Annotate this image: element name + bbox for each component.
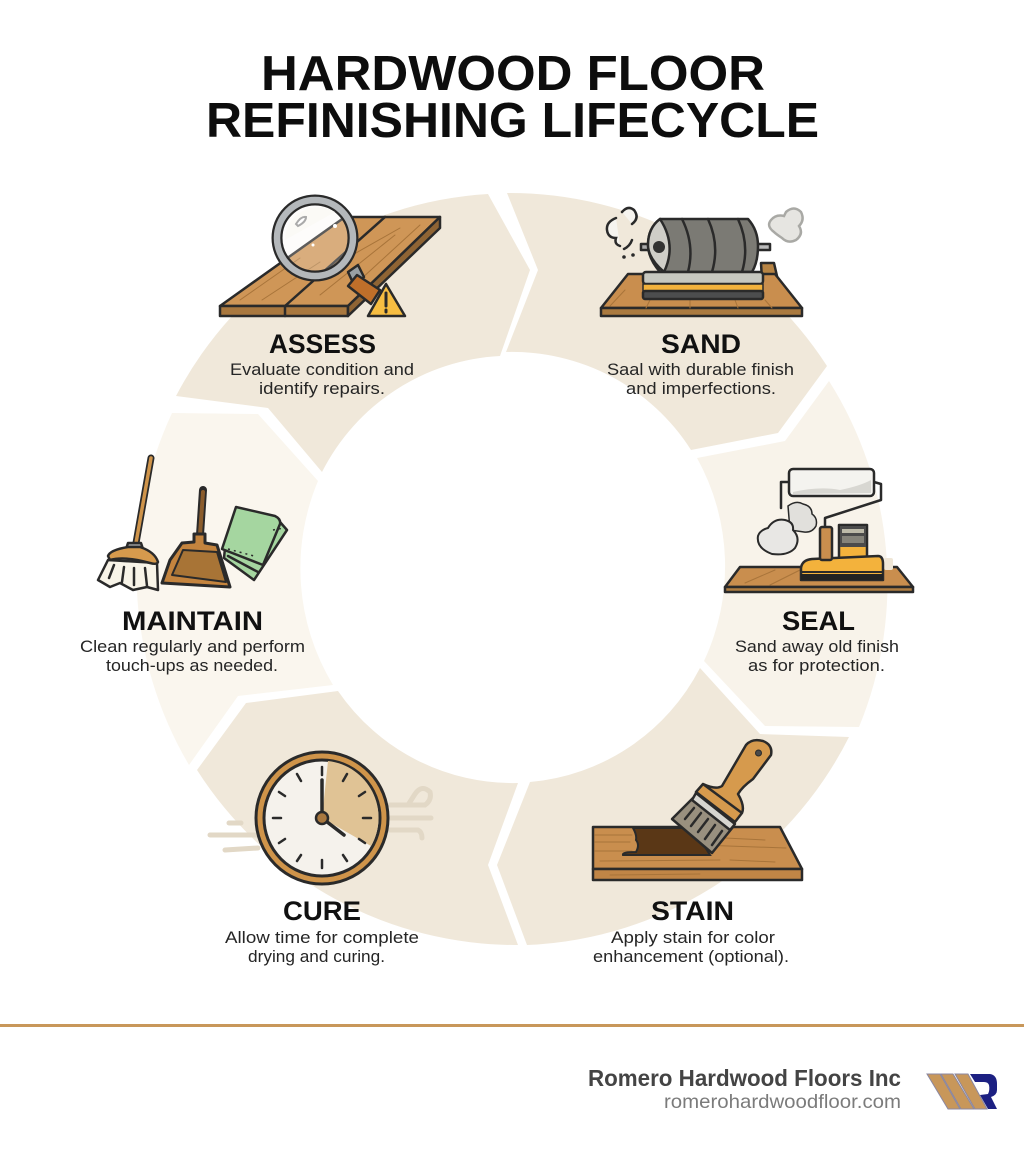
icon: clock bbox=[256, 752, 388, 884]
icon: paint roller bbox=[789, 469, 874, 496]
description: maintain: touch-ups as needed. bbox=[106, 656, 278, 675]
description: stain: enhancement (optional). bbox=[593, 947, 789, 966]
logo letter R bbox=[970, 1074, 997, 1109]
panel: sand bbox=[506, 193, 827, 450]
segment: sand bbox=[506, 193, 827, 450]
icon: drum sander bbox=[601, 208, 803, 316]
title: REFINISHING LIFECYCLE bbox=[206, 94, 819, 148]
description: seal: Sand away old finish bbox=[735, 637, 899, 656]
description: seal: as for protection. bbox=[748, 656, 885, 675]
icon: dust cloud right bbox=[769, 208, 803, 242]
description: sand bbox=[607, 360, 794, 398]
icon: magnifying glass bbox=[277, 200, 380, 304]
segment: seal bbox=[697, 381, 888, 727]
segment: assess bbox=[176, 194, 530, 472]
icon: green cleaning cloth bbox=[222, 507, 287, 580]
heading: stain: STAIN bbox=[651, 896, 734, 926]
description: sand: Saal with durable finish bbox=[607, 360, 794, 379]
panel: stain bbox=[497, 668, 849, 966]
icon: paint brush bbox=[672, 740, 771, 853]
logo planks bbox=[927, 1074, 987, 1109]
heading: sand: SAND bbox=[661, 329, 741, 359]
segment: maintain bbox=[137, 413, 333, 765]
description: assess: Evaluate condition and bbox=[230, 360, 414, 379]
description: cure: Allow time for complete bbox=[225, 928, 419, 947]
footer rule bbox=[0, 1024, 1024, 1027]
heading: maintain: MAINTAIN bbox=[122, 606, 263, 636]
icon: broom bbox=[98, 458, 158, 590]
icon: wood board bbox=[593, 740, 802, 880]
icon: dustpan bbox=[162, 490, 230, 587]
website: romerohardwoodfloor.com bbox=[664, 1091, 901, 1113]
panel: cure bbox=[197, 691, 518, 966]
title bbox=[206, 47, 819, 148]
icon: dust cloud left bbox=[607, 208, 637, 249]
description: maintain: Clean regularly and perform bbox=[80, 637, 305, 656]
description: assess bbox=[230, 360, 414, 398]
segment: cure bbox=[197, 691, 518, 945]
icon: warning triangle bbox=[368, 284, 405, 316]
description: cure: drying and curing. bbox=[248, 947, 385, 966]
logo bbox=[927, 1074, 997, 1109]
panel: assess bbox=[176, 194, 530, 472]
footer brand bbox=[588, 1065, 901, 1113]
icon: stained area bbox=[623, 828, 710, 855]
description: seal bbox=[735, 637, 899, 675]
panel: seal bbox=[697, 381, 913, 727]
icon: fume clouds bbox=[788, 502, 816, 532]
icon: wind lines bbox=[210, 788, 431, 850]
heading: seal: SEAL bbox=[782, 606, 855, 636]
icon: sealing machine and roller bbox=[725, 469, 913, 592]
panel: maintain bbox=[80, 413, 333, 765]
description: maintain bbox=[80, 637, 305, 675]
heading: cure: CURE bbox=[283, 896, 361, 926]
heading: assess: ASSESS bbox=[269, 329, 376, 359]
description: stain: Apply stain for color bbox=[611, 928, 775, 947]
segment: stain bbox=[497, 668, 849, 945]
icon: planks under magnifier bbox=[220, 200, 440, 316]
company name: Romero Hardwood Floors Inc bbox=[588, 1065, 901, 1091]
description: assess: identify repairs. bbox=[259, 379, 385, 398]
description: sand: and imperfections. bbox=[626, 379, 776, 398]
description: stain bbox=[593, 928, 789, 966]
description: cure bbox=[225, 928, 419, 966]
title: HARDWOOD FLOOR bbox=[261, 47, 765, 101]
